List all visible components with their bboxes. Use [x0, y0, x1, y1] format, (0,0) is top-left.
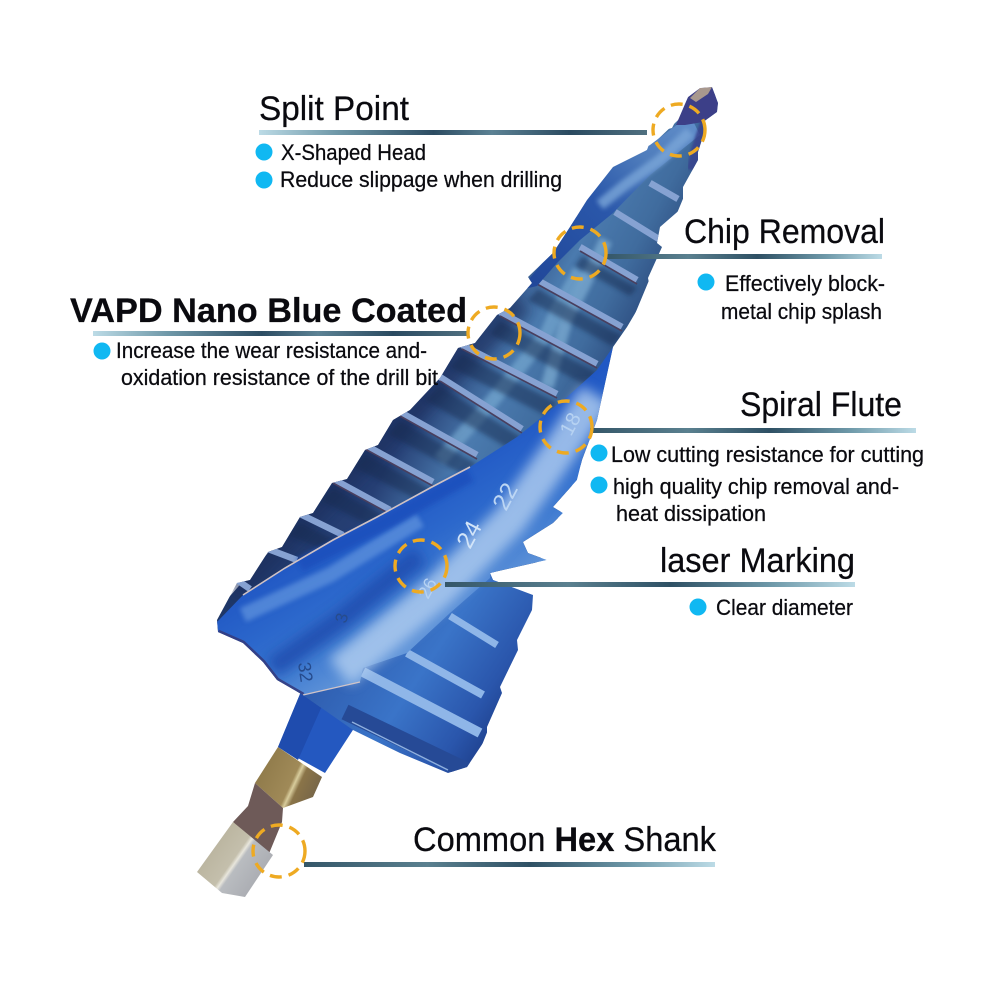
hex shank: neck: [233, 783, 283, 856]
lower step highlights: [363, 616, 497, 733]
text: Reduce slippage when drilling: [280, 167, 562, 192]
circle: chip removal: [554, 227, 606, 279]
text: Low cutting resistance for cutting: [611, 442, 924, 467]
tip right shade: [692, 92, 712, 170]
bullet: [690, 598, 706, 616]
heading: Split Point: [259, 90, 410, 128]
upper flute ribbon: [527, 124, 698, 288]
bullet: [94, 342, 110, 360]
text: Clear diameter: [716, 595, 853, 620]
bullet: [590, 476, 608, 494]
illustration: step drill bit: [197, 80, 720, 897]
spiral flute face: [217, 347, 613, 695]
bullet: [256, 144, 272, 160]
leader line: [259, 130, 647, 135]
leader line: [445, 582, 855, 587]
bullet: [698, 274, 714, 290]
laser markings: 3: [332, 611, 352, 625]
hex shank: silver tip: [197, 822, 273, 897]
tip point: [676, 87, 718, 125]
step highlight bands: [237, 183, 678, 589]
flute cutting edge: [243, 467, 470, 595]
circle: spiral flute: [540, 401, 592, 453]
step shadows: [288, 256, 637, 552]
dashed highlight circles: [253, 104, 705, 877]
laser markings: 18: [556, 409, 586, 439]
flute dark band: centre: [272, 555, 420, 668]
circle: laser marking: [395, 540, 447, 592]
laser markings: 24: [451, 517, 488, 553]
laser markings: 26: [414, 575, 441, 602]
text: metal chip splash: [721, 299, 882, 324]
text: heat dissipation: [616, 501, 766, 526]
bullet: [256, 172, 272, 188]
bullet: [590, 444, 608, 462]
left dark edge shade: [230, 300, 520, 590]
text: Increase the wear resistance and-: [116, 338, 427, 363]
heading: laser Marking: [660, 542, 855, 580]
light streak: left: [440, 270, 580, 460]
circle: split point: [653, 104, 705, 156]
leader line: [93, 331, 468, 336]
circle: coating: [468, 307, 520, 359]
heading: Chip Removal: [684, 213, 885, 251]
drill body: [200, 80, 720, 780]
leader line: [590, 428, 916, 433]
step edge lines: [333, 251, 637, 514]
stepped cone: [200, 80, 720, 720]
laser markings: 22: [487, 479, 524, 515]
flute highlight: [340, 395, 596, 672]
leader line: [304, 862, 715, 867]
callout: laser marking: [445, 542, 855, 620]
text: X-Shaped Head: [281, 140, 426, 165]
light streak: right: [547, 240, 606, 387]
callout: chip removal: [605, 213, 885, 324]
flute dark rim: [218, 632, 303, 695]
base rim: [345, 712, 470, 772]
callout: split point: [256, 90, 647, 192]
circle: hex shank: [253, 825, 305, 877]
laser markings: 32: [294, 661, 317, 683]
heading: Spiral Flute: [740, 386, 902, 424]
ribbon highlight: [600, 132, 690, 205]
flute streak: [243, 520, 420, 615]
heading: Common Hex Shank: [413, 821, 717, 859]
text: Effectively block-: [725, 271, 885, 296]
callout: nano coating: [70, 292, 468, 390]
callout: spiral flute: [590, 386, 924, 526]
callout: hex shank: [304, 821, 717, 867]
text: oxidation resistance of the drill bit: [121, 365, 438, 390]
laser markings: [294, 409, 586, 683]
hex shank: gold section: [255, 747, 322, 808]
text: high quality chip removal and-: [613, 474, 899, 499]
hex shank: blue section: [278, 682, 362, 773]
leader line: [605, 254, 882, 259]
flute dark band: edge: [300, 475, 470, 565]
heading: VAPD Nano Blue Coated: [70, 292, 467, 330]
lower stepped section: [297, 572, 533, 773]
